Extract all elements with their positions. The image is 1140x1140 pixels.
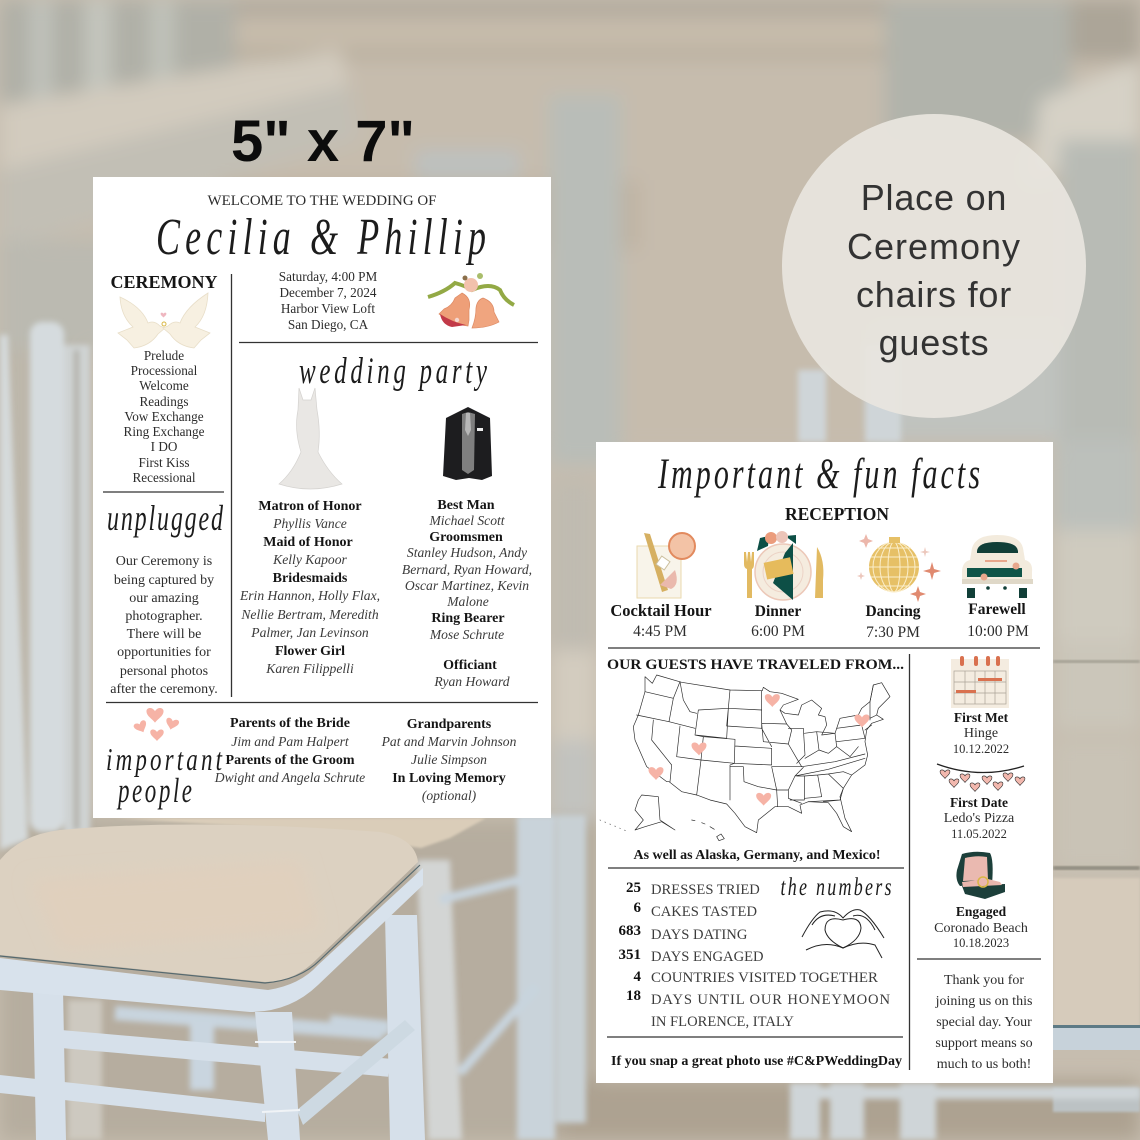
welcome heading: WELCOME TO THE WEDDING OF	[208, 193, 436, 209]
unplugged message: our amazing	[129, 591, 199, 606]
groom party names	[402, 498, 532, 689]
bridal party names: Kelly Kapoor	[272, 552, 348, 567]
grandparents names: (optional)	[422, 788, 477, 804]
hashtag callout: If you snap a great photo use #C&PWeddingDay	[611, 1054, 902, 1069]
grandparents names: Julie Simpson	[411, 752, 487, 767]
unplugged message: opportunities for	[117, 645, 211, 660]
reception timeline labels: 7:30 PM	[866, 624, 920, 641]
map footnote: As well as Alaska, Germany, and Mexico!	[634, 848, 880, 863]
callout: place on ceremony chairs: Ceremony	[847, 226, 1021, 267]
ceremony heading: CEREMONY	[110, 272, 218, 292]
grandparents names: In Loving Memory	[392, 771, 506, 786]
groom party names: Stanley Hudson, Andy	[407, 545, 528, 560]
the numbers list: 18	[626, 988, 641, 1004]
event details	[279, 269, 377, 332]
milestone: first met	[953, 710, 1009, 756]
reception timeline labels: Farewell	[968, 601, 1026, 618]
ceremony order list: Recessional	[132, 470, 196, 485]
ceremony order list: First Kiss	[139, 455, 189, 470]
callout: place on ceremony chairs: Place on	[861, 177, 1007, 218]
icon: cocktail	[637, 533, 695, 598]
icon: getaway car	[962, 535, 1033, 598]
map heading: OUR GUESTS HAVE TRAVELED FROM...	[607, 657, 904, 673]
thank you message: joining us on this	[935, 994, 1032, 1009]
the numbers list: 683	[618, 923, 641, 939]
ceremony order list: Readings	[139, 394, 189, 409]
bridal party names: Erin Hannon, Holly Flax,	[239, 588, 380, 603]
thank you message: support means so	[935, 1036, 1033, 1051]
grandparents names	[381, 717, 517, 804]
groom party names: Ring Bearer	[431, 611, 505, 626]
the numbers list: DAYS UNTIL OUR HONEYMOON	[651, 992, 890, 1008]
ceremony order list: Processional	[131, 363, 198, 378]
callout: place on ceremony chairs	[782, 114, 1086, 418]
event details: December 7, 2024	[279, 285, 377, 300]
left-side chair backs	[0, 322, 90, 850]
parents names: Dwight and Angela Schrute	[214, 770, 365, 785]
parents names: Parents of the Bride	[230, 716, 350, 731]
chair legs and rungs	[68, 815, 586, 1140]
groom party names: Mose Schrute	[429, 627, 504, 642]
icon: doves	[118, 293, 210, 348]
milestone: first met: Hinge	[964, 726, 998, 741]
callout: place on ceremony chairs: guests	[879, 322, 989, 363]
important people script heading: people	[116, 773, 192, 810]
the numbers list: COUNTRIES VISITED TOGETHER	[651, 970, 878, 986]
panel: wedding program card	[93, 177, 551, 818]
groom party names: Michael Scott	[428, 513, 506, 528]
reception timeline labels: Cocktail Hour	[610, 601, 712, 620]
ceremony order list: I DO	[151, 439, 177, 454]
milestone: first date: Ledo's Pizza	[944, 811, 1015, 826]
the numbers script heading: the numbers	[780, 872, 892, 901]
icon: heart hands	[802, 910, 884, 958]
icon: calendar	[951, 656, 1009, 708]
ceremony order list: Vow Exchange	[124, 409, 204, 424]
bridal party names: Bridesmaids	[273, 571, 348, 586]
parents names	[214, 716, 365, 785]
unplugged message: after the ceremony.	[110, 682, 218, 697]
unplugged message: being captured by	[114, 573, 214, 588]
bridal party names: Palmer, Jan Levinson	[250, 625, 369, 640]
groom party names: Malone	[446, 594, 489, 609]
unplugged message: personal photos	[120, 664, 208, 679]
icon: tuxedo jacket	[443, 407, 492, 480]
bridal party names: Maid of Honor	[263, 535, 353, 550]
thank you message: Thank you for	[944, 973, 1024, 988]
important people script heading: important	[106, 742, 223, 778]
icon: disco ball	[857, 534, 941, 602]
the numbers list: DRESSES TRIED	[651, 882, 760, 898]
milestone: first date: First Date	[950, 795, 1008, 810]
important people script heading	[106, 742, 223, 810]
unplugged script heading: unplugged	[107, 498, 224, 538]
unplugged message: Our Ceremony is	[116, 554, 212, 569]
reception timeline labels	[610, 601, 1029, 641]
icon: wedding dress	[279, 388, 342, 489]
thank you message	[935, 973, 1033, 1072]
groom party names: Groomsmen	[429, 530, 503, 545]
icon: dinner plate	[744, 531, 823, 600]
milestone: engaged: 10.18.2023	[953, 936, 1009, 950]
icon: pink hearts	[133, 708, 180, 741]
the numbers list: 351	[618, 947, 641, 963]
groom party names: Officiant	[443, 658, 497, 673]
reception timeline labels: Dinner	[755, 603, 801, 620]
seat frame and cushion	[0, 868, 423, 1012]
groom party names: Best Man	[437, 498, 495, 513]
grandparents names: Grandparents	[407, 717, 492, 732]
heading: 5 x 7 size: 5" x 7"	[231, 109, 415, 174]
seat of second chair	[115, 818, 486, 848]
unplugged message: There will be	[127, 627, 201, 642]
the numbers list: DAYS DATING	[651, 927, 748, 943]
milestone: engaged: Engaged	[956, 904, 1007, 919]
milestone: first met: 10.12.2022	[953, 742, 1009, 756]
milestone: engaged	[934, 904, 1028, 950]
unplugged message: photographer.	[125, 609, 203, 624]
the numbers list: 6	[634, 900, 642, 916]
bridal party names: Phyllis Vance	[272, 516, 347, 531]
ceremony order list: Ring Exchange	[124, 424, 205, 439]
icon: heart banner	[937, 764, 1025, 791]
groom party names: Oscar Martinez, Kevin	[405, 578, 529, 593]
parents names: Parents of the Groom	[226, 753, 355, 768]
the numbers list	[618, 880, 890, 1030]
groom party names: Ryan Howard	[433, 674, 510, 689]
bridal party names: Matron of Honor	[258, 499, 362, 514]
reception timeline labels: 10:00 PM	[967, 623, 1029, 640]
reception timeline labels: 6:00 PM	[751, 623, 805, 640]
groom party names: Bernard, Ryan Howard,	[402, 562, 532, 577]
grandparents names: Pat and Marvin Johnson	[381, 734, 517, 749]
event details: San Diego, CA	[288, 317, 369, 332]
thank you message: much to us both!	[937, 1057, 1031, 1072]
parents names: Jim and Pam Halpert	[231, 734, 350, 749]
reception timeline labels: Dancing	[865, 603, 921, 620]
the numbers list: CAKES TASTED	[651, 904, 757, 920]
icon: wedding bells	[428, 273, 514, 328]
milestone: first met: First Met	[954, 710, 1009, 725]
bridal party names: Flower Girl	[275, 644, 345, 659]
bridal party names: Nellie Bertram, Meredith	[240, 607, 379, 622]
map of the United States with hearts	[600, 675, 890, 841]
reception timeline labels: 4:45 PM	[633, 623, 687, 640]
thank you message: special day. Your	[936, 1015, 1032, 1030]
bridal party names: Karen Filippelli	[265, 661, 354, 676]
milestone: first date	[944, 795, 1015, 841]
ceremony order list: Prelude	[144, 348, 184, 363]
the numbers list: DAYS ENGAGED	[651, 949, 764, 965]
bridal party names	[239, 499, 380, 676]
panel: important and fun facts card	[596, 442, 1053, 1083]
ceremony order list	[124, 348, 205, 485]
milestone: first date: 11.05.2022	[951, 827, 1007, 841]
unplugged message	[110, 554, 218, 697]
icon: ring box	[956, 852, 1005, 899]
event details: Saturday, 4:00 PM	[279, 269, 377, 284]
ceremony order list: Welcome	[139, 378, 189, 393]
script title: Important & fun facts	[657, 451, 980, 498]
wedding party script heading: wedding party	[299, 350, 488, 391]
couple names script title: Cecilia & Phillip	[156, 207, 486, 266]
the numbers list: 25	[626, 880, 641, 896]
column divider	[230, 274, 232, 697]
milestone: engaged: Coronado Beach	[934, 921, 1028, 936]
event details: Harbor View Loft	[281, 301, 375, 316]
reception heading: RECEPTION	[785, 504, 889, 524]
callout: place on ceremony chairs: chairs for	[856, 274, 1012, 315]
the numbers list: IN FLORENCE, ITALY	[651, 1014, 794, 1030]
the numbers list: 4	[634, 969, 642, 985]
